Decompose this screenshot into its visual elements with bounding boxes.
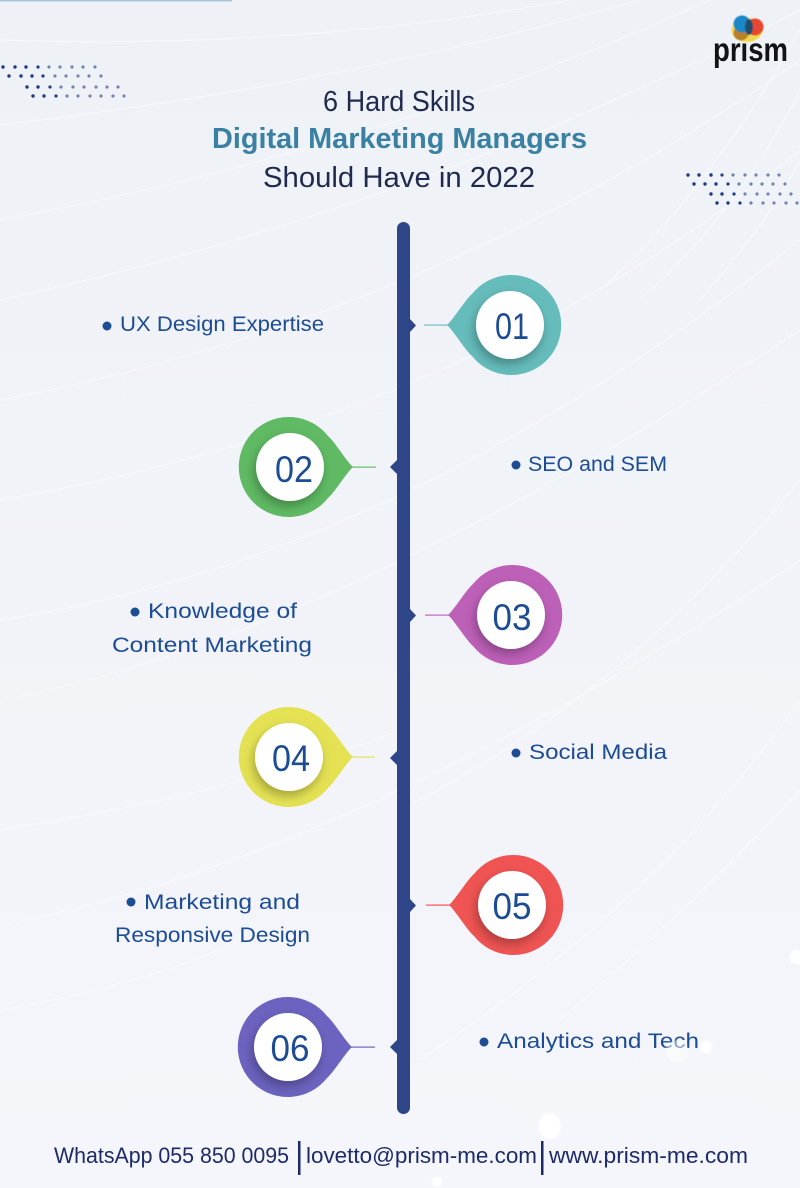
title: 6 Hard Skills [323, 86, 475, 118]
pin 01: 01 [495, 306, 529, 347]
timeline spine [390, 222, 416, 1114]
skill: Social Media: Social Media [529, 741, 667, 764]
footer contact line [54, 1141, 748, 1175]
skill: Knowledge of Content Marketing [112, 600, 312, 657]
skill: Knowledge of Content Marketing: Knowledge of [148, 600, 297, 623]
pin 06 [238, 997, 375, 1097]
pin 02: 02 [275, 449, 313, 490]
skill: SEO and SEM: SEO and SEM [528, 453, 667, 476]
pin 04 [239, 707, 375, 807]
decorative dots: top right [686, 173, 799, 205]
title: Should Have in 2022 [263, 162, 535, 194]
footer contact line: www.prism-me.com [548, 1143, 748, 1168]
icon: prism logo mark [732, 16, 764, 42]
pin 04: 04 [272, 738, 310, 779]
pin 03 [425, 565, 562, 665]
skill: Knowledge of Content Marketing: Content Marketing [112, 634, 312, 657]
skill: Marketing and Responsive Design: Marketing and [144, 891, 300, 914]
skill: Analytics and Tech: Analytics and Tech [497, 1030, 699, 1053]
footer contact line: WhatsApp 055 850 0095 [54, 1143, 289, 1168]
decorative bokeh [432, 950, 800, 1187]
pin 03: 03 [492, 597, 532, 638]
pin 05 [426, 855, 563, 955]
pin 06: 06 [270, 1028, 310, 1069]
skill: Marketing and Responsive Design: Responsive Design [115, 924, 310, 947]
footer contact line: lovetto@prism-me.com [306, 1143, 537, 1168]
logo: prism [713, 16, 788, 68]
title: Digital Marketing Managers [212, 123, 587, 155]
skill: Marketing and Responsive Design [115, 891, 310, 947]
pin 05: 05 [492, 886, 532, 927]
decorative dots: top left [1, 65, 126, 98]
title [212, 86, 587, 194]
pin 01 [424, 275, 561, 375]
skill: UX Design Expertise: UX Design Expertise [120, 313, 324, 336]
pin 02 [239, 417, 376, 517]
